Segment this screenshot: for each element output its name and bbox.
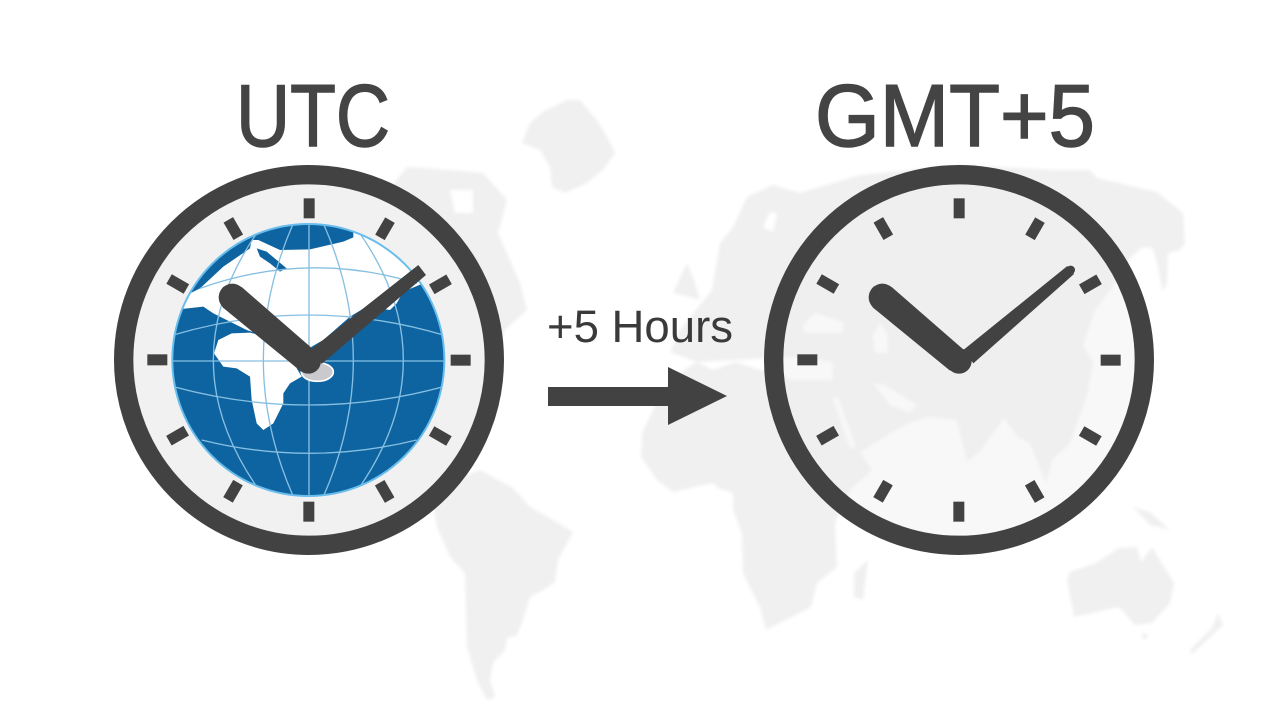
sea: Black Sea area [803,313,843,333]
map: New Zealand [1190,613,1223,654]
label: +5 Hours: +5 Hours [547,301,733,352]
background world map [380,100,1223,700]
map: Madagascar [854,560,868,600]
globe: graticule [172,223,445,497]
map: Tasmania [1141,634,1148,641]
hour ticks [797,198,1121,522]
sea: Red Sea [832,397,856,449]
title: UTC: UTC [236,66,390,165]
infographic canvas [114,84,1222,699]
sea: Persian Gulf [873,383,917,413]
map: Australia [1067,547,1174,625]
clock ring [124,175,494,545]
globe [160,210,445,497]
clock face [779,180,1139,540]
sea: Caspian [873,323,888,353]
clock hands [869,266,1075,374]
globe: northern land [183,232,420,368]
map: New Guinea [1133,507,1170,530]
map: Britain [673,263,700,300]
left clock with globe [124,175,494,545]
map: seas [450,190,917,449]
globe: Africa [214,333,302,430]
sea: Mediterranean [697,357,833,380]
right clock [774,175,1144,545]
clock ring [774,175,1144,545]
map: North America [380,167,527,460]
clock face [129,180,489,540]
globe: Baltic [257,248,287,272]
sea: Baltic [763,212,777,232]
map: South America [430,470,573,700]
globe: grey patch [301,363,333,381]
clock hands [219,265,426,374]
arrow [548,367,727,425]
sea: Hudson Bay [450,190,473,213]
map: Eurasia and Africa [641,165,1185,630]
hour ticks [147,198,471,522]
map: Greenland [522,100,615,193]
title: GMT+5: GMT+5 [815,66,1095,165]
